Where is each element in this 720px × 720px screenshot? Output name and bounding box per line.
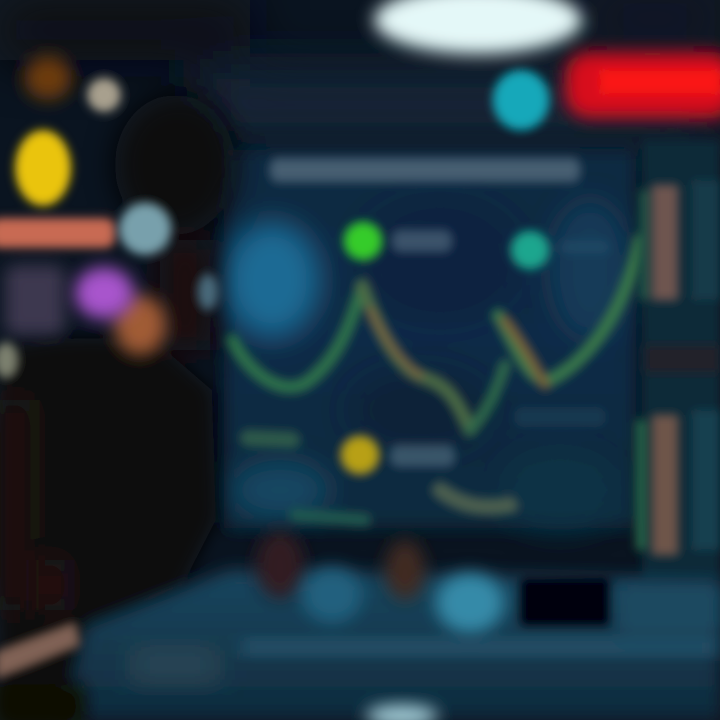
person silhouette bbox=[0, 95, 235, 720]
icon: yellow block bbox=[15, 130, 71, 206]
icon: cream dot bbox=[87, 78, 121, 112]
panel: right side monitor bbox=[636, 140, 720, 580]
icon: green dot with label bbox=[344, 222, 452, 260]
panel: desk bbox=[60, 531, 720, 720]
icon: salmon band bbox=[0, 218, 115, 248]
red green bars bbox=[636, 180, 720, 555]
icon: pale blue dot bbox=[119, 203, 171, 255]
desk objects bbox=[256, 531, 304, 599]
icon: white spot bbox=[0, 342, 18, 378]
icon: muted purple block bbox=[5, 265, 65, 335]
icon: teal dot with label bbox=[511, 231, 610, 269]
teal light bbox=[493, 70, 549, 130]
black device bbox=[520, 578, 610, 626]
icon: yellow dot with label bbox=[341, 436, 455, 474]
heading: blurred monitor title bbox=[270, 158, 580, 182]
monitor blue glow left bbox=[224, 222, 320, 338]
sleeve band lower left bbox=[0, 622, 85, 720]
icon: violet glow bbox=[74, 267, 134, 319]
line chart bbox=[232, 240, 640, 520]
hand / skin glow bbox=[114, 295, 166, 355]
red sign bbox=[565, 52, 720, 118]
ceiling light bbox=[374, 0, 582, 54]
left floating icons bbox=[0, 56, 218, 378]
icon: orange dot bbox=[24, 56, 72, 100]
panel: central monitor bbox=[224, 150, 640, 530]
upper wall glow bbox=[0, 0, 720, 140]
